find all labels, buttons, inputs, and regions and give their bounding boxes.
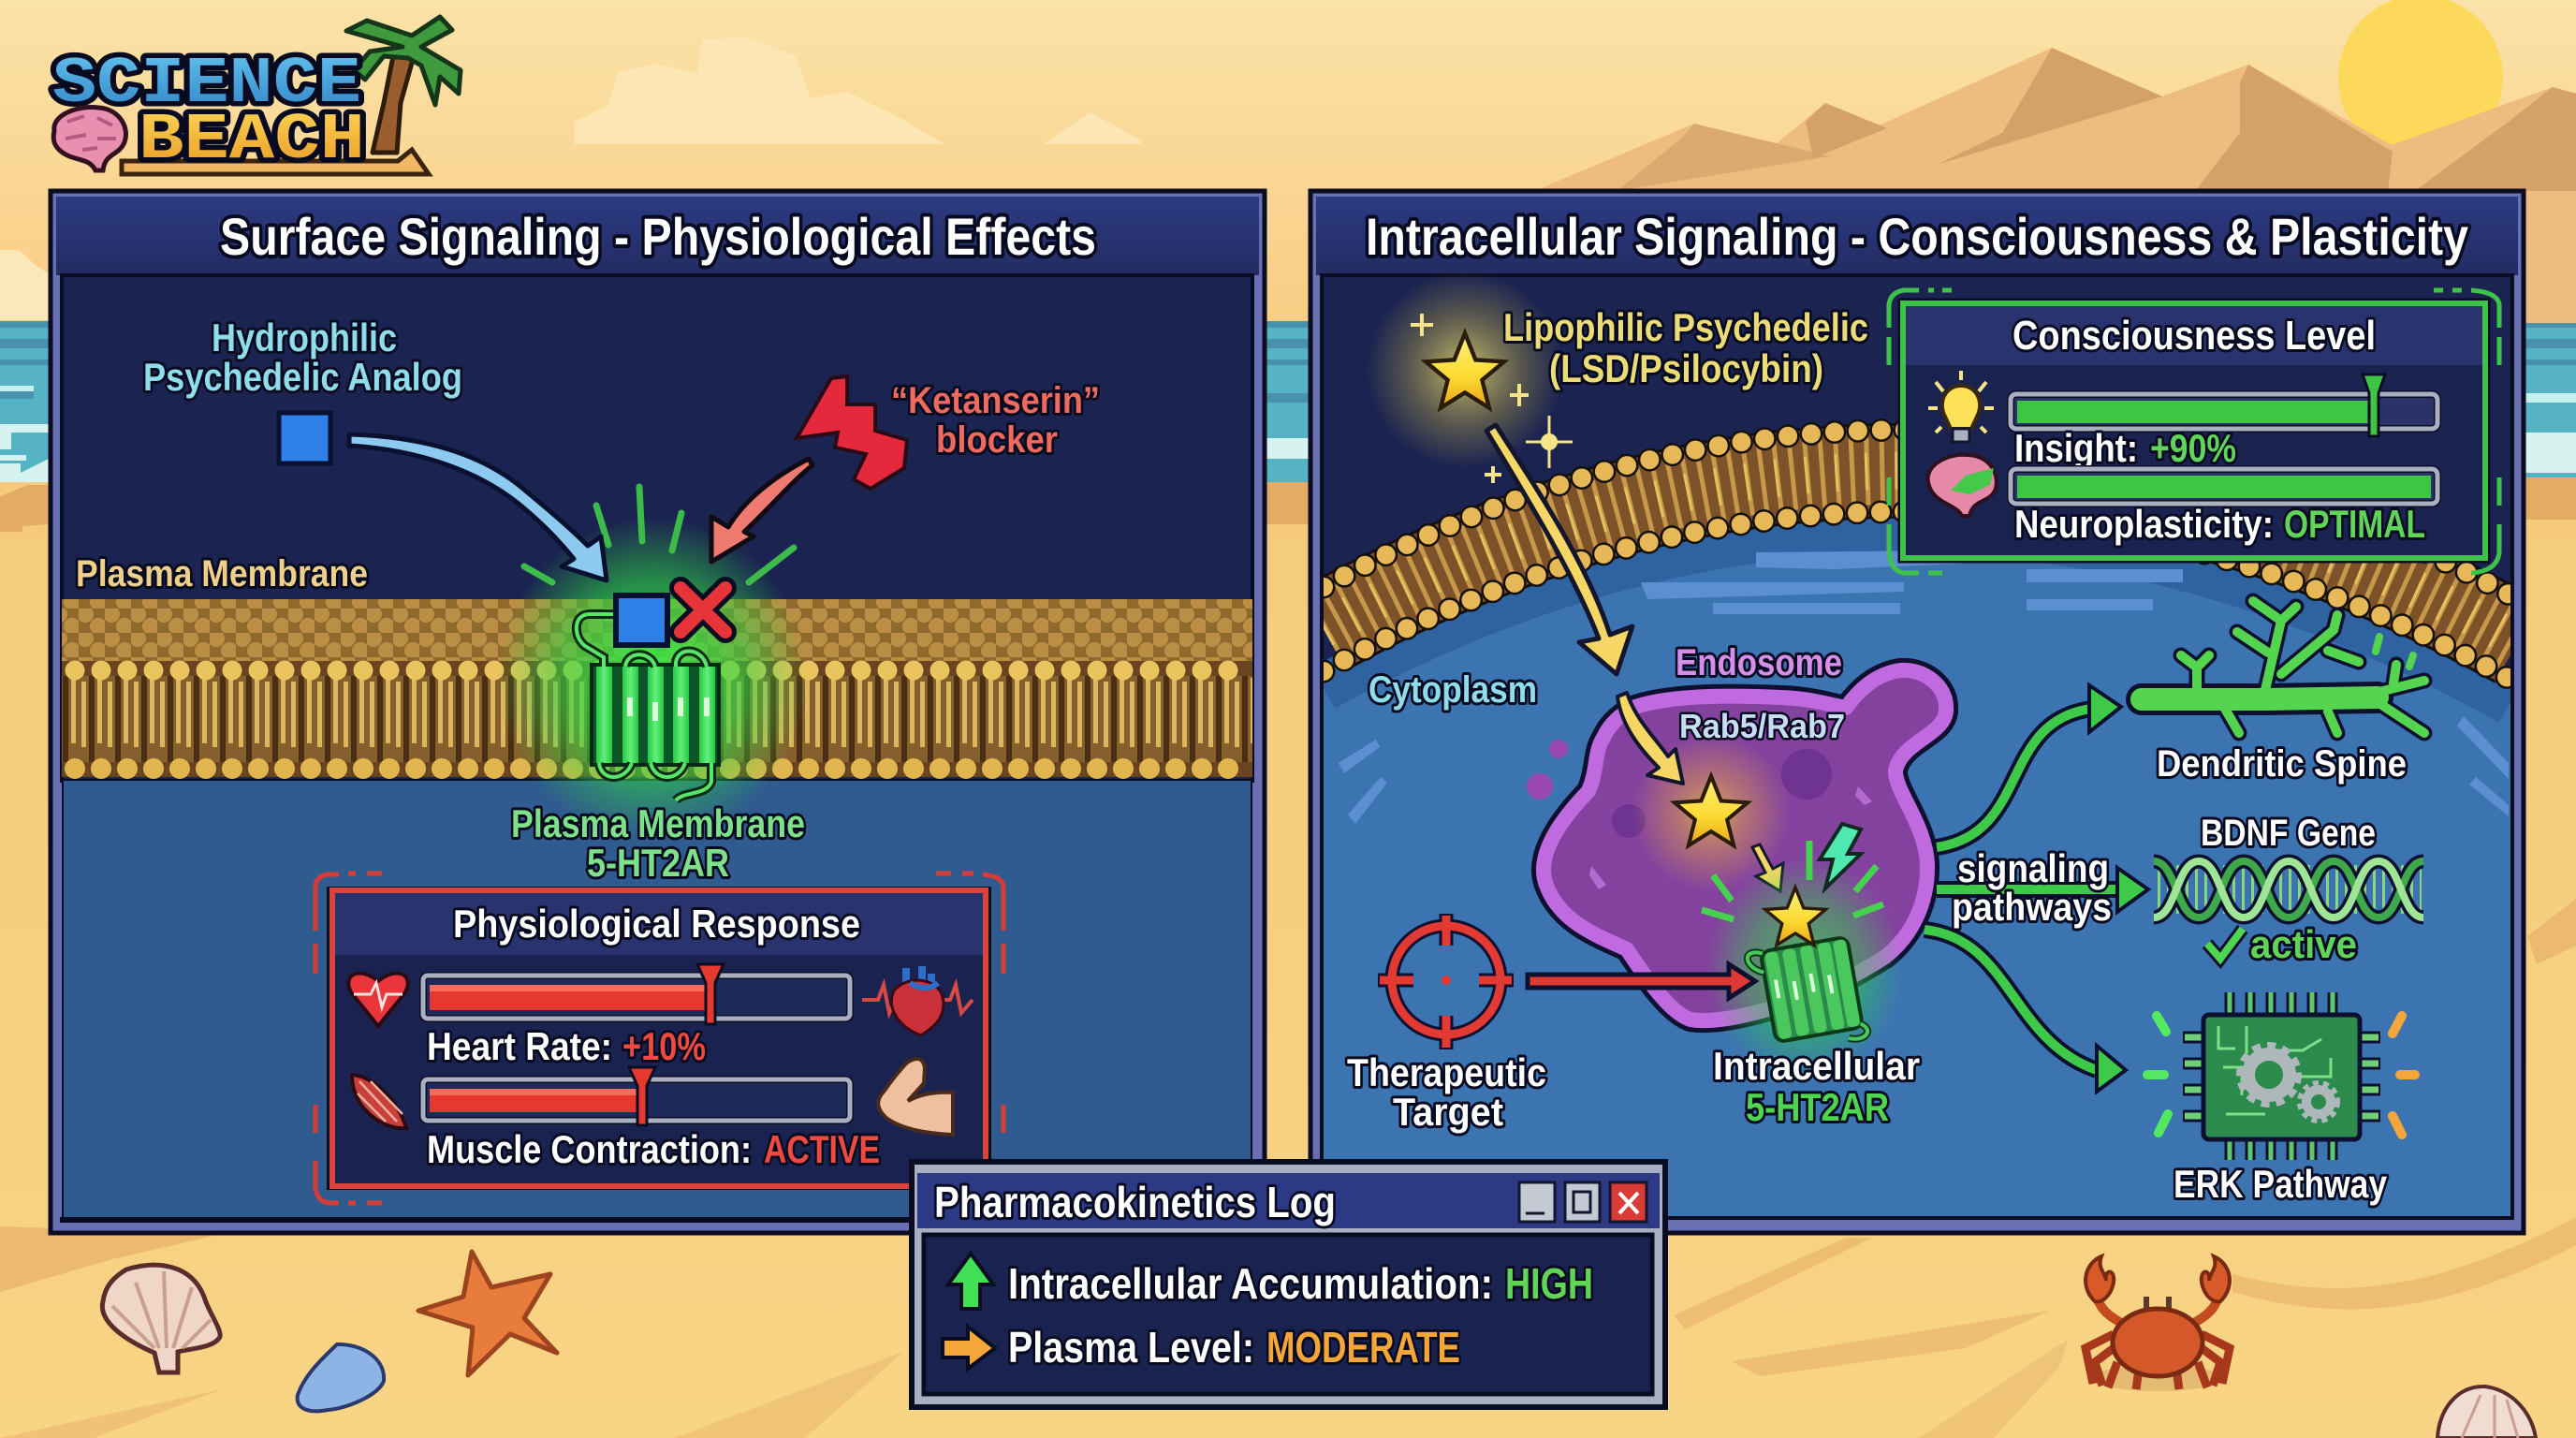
panel: physiological response [315, 873, 1003, 1203]
window title bar [917, 1173, 1660, 1228]
insight text: +90% [2150, 426, 2236, 470]
neuroplasticity bar [2011, 469, 2437, 504]
accumulation row: HIGH [1505, 1259, 1593, 1308]
intracellular receptor label [1713, 1044, 1920, 1129]
BDNF label: BDNF Gene [2201, 813, 2376, 854]
cytoplasm fill [1324, 512, 2510, 1216]
hydrophilic molecule square [279, 413, 330, 463]
icon: DNA helix [2154, 861, 2423, 917]
receptor label: 5-HT2AR [587, 841, 729, 885]
plasma level row: Plasma Level: [1008, 1323, 1254, 1372]
ketanserin label: “Ketanserin” [891, 380, 1100, 421]
insight text: Insight: [2014, 426, 2138, 470]
consciousness header [1906, 306, 2482, 365]
arrow: star to endosome [1486, 425, 1632, 674]
receptor rays [524, 487, 794, 582]
window body [924, 1235, 1652, 1394]
window buttons [1519, 1182, 1647, 1222]
icon: dendritic spine [2142, 601, 2424, 733]
icon: ERK chip [2183, 992, 2380, 1160]
intracellular receptor label: 5-HT2AR [1746, 1085, 1889, 1129]
target label [1347, 1050, 1546, 1134]
logo: Science Beach [52, 17, 461, 178]
intracellular receptor label: Intracellular [1713, 1044, 1920, 1088]
icon: anatomical heart [862, 966, 973, 1035]
active status: active [2250, 922, 2357, 966]
neuroplasticity text: OPTIMAL [2284, 502, 2425, 546]
panel frame [1310, 191, 2524, 1233]
lipophilic label: (LSD/Psilocybin) [1549, 346, 1823, 390]
wordmark BEACH: BEACH [139, 104, 365, 178]
icon: starfish [418, 1252, 557, 1375]
arrow: into endosome [1617, 693, 1683, 784]
logo sand base [122, 150, 429, 174]
ketanserin icon [797, 376, 907, 489]
plasma membrane label: Plasma Membrane [76, 553, 368, 594]
icon: light bulb [1928, 371, 1994, 442]
arrow: target to receptor [1528, 964, 1755, 998]
panel: intracellular signaling [1310, 191, 2524, 1233]
receptor glow [498, 518, 807, 840]
accumulation row: Intracellular Accumulation: [1008, 1259, 1493, 1308]
target label: Target [1393, 1090, 1503, 1134]
heart rate text: Heart Rate: [427, 1024, 612, 1068]
receptor: plasma 5-HT2AR [577, 614, 719, 800]
panel header [1316, 197, 2518, 275]
icon: flexed arm [878, 1059, 953, 1135]
panel header [56, 197, 1259, 275]
muscle contraction text: Muscle Contraction: [427, 1127, 752, 1171]
signaling pathways label [1952, 846, 2112, 929]
lipophilic label [1503, 305, 1868, 390]
dunes [1516, 48, 2576, 323]
lipid bilayer [62, 599, 1252, 777]
muscle contraction bar [423, 1067, 850, 1125]
arrow: blocker to receptor [711, 459, 812, 562]
active status [2207, 922, 2357, 966]
arrow: analog to receptor [349, 434, 607, 580]
heart rate bar [423, 964, 850, 1024]
panel frame [51, 191, 1265, 1233]
ketanserin label: blocker [936, 419, 1058, 461]
cytoplasm ripples [1339, 550, 2509, 824]
ERK label: ERK Pathway [2174, 1162, 2388, 1206]
wordmark SCIENCE: SCIENCE [52, 48, 361, 122]
icon: crab [2086, 1256, 2230, 1391]
bound analog square [616, 595, 667, 645]
dendritic spine label: Dendritic Spine [2157, 743, 2407, 785]
panel title: Surface Signaling - Physiological Effects [220, 207, 1096, 266]
icon: muscle fiber [352, 1075, 406, 1128]
receptor glow [1706, 857, 1903, 1081]
window title: Pharmacokinetics Log [934, 1178, 1336, 1226]
icon: heart [348, 973, 408, 1026]
icon: therapeutic target [1378, 914, 1514, 1049]
plasma level row [1008, 1323, 1460, 1372]
clouds [575, 37, 1141, 144]
hydrophilic label: Psychedelic Analog [143, 355, 462, 399]
palm tree [346, 17, 461, 153]
hydrophilic label [143, 315, 462, 399]
sun [2338, 0, 2503, 160]
lipophilic star with sparkles [1367, 271, 1573, 483]
endosome label: Endosome [1676, 642, 1842, 683]
blocked X mark [681, 588, 725, 632]
icon: brain [1928, 455, 1997, 516]
insight bar [2011, 374, 2437, 436]
sand streaks [0, 899, 2576, 1438]
neuroplasticity text: Neuroplasticity: [2014, 502, 2274, 546]
lipophilic label: Lipophilic Psychedelic [1503, 305, 1868, 349]
response title: Physiological Response [453, 902, 860, 946]
icon: up arrow [948, 1254, 993, 1309]
receptor label [511, 801, 805, 885]
hydrophilic label: Hydrophilic [212, 315, 397, 360]
star in endosome [1675, 776, 1748, 845]
icon: corner shell [2437, 1387, 2536, 1438]
icon: right arrow [943, 1327, 995, 1369]
icon: lightning [1820, 824, 1861, 888]
star on receptor [1765, 888, 1825, 946]
rab label: Rab5/Rab7 [1679, 707, 1845, 745]
receptor: intracellular 5-HT2AR [1747, 935, 1868, 1055]
cytoplasm label: Cytoplasm [1368, 669, 1537, 711]
target label: Therapeutic [1347, 1050, 1546, 1094]
chip sparks [2147, 1016, 2415, 1135]
window: pharmacokinetics log [912, 1162, 1665, 1407]
activation sparks [1702, 841, 1883, 919]
curved lipid membrane [1324, 430, 2518, 683]
heart rate text: +10% [622, 1024, 706, 1068]
icon: blue shell [298, 1344, 384, 1411]
response header [332, 892, 986, 955]
signaling pathways label: pathways [1952, 885, 2112, 929]
signaling pathways label: signaling [1957, 846, 2109, 890]
plasma level row: MODERATE [1266, 1323, 1460, 1372]
panel: consciousness level [1889, 290, 2499, 573]
receptor label: Plasma Membrane [511, 801, 805, 845]
icon: scallop shell [102, 1265, 220, 1372]
endosome [1527, 670, 1946, 1020]
logo brain icon [53, 107, 125, 170]
muscle contraction text: ACTIVE [764, 1127, 880, 1171]
panel: surface signaling [51, 191, 1265, 1233]
small arrow to receptor [1752, 844, 1783, 891]
consciousness title: Consciousness Level [2012, 313, 2376, 359]
signaling arrows [1925, 685, 2148, 1092]
ketanserin label [891, 380, 1100, 461]
insight text [2014, 426, 2236, 470]
